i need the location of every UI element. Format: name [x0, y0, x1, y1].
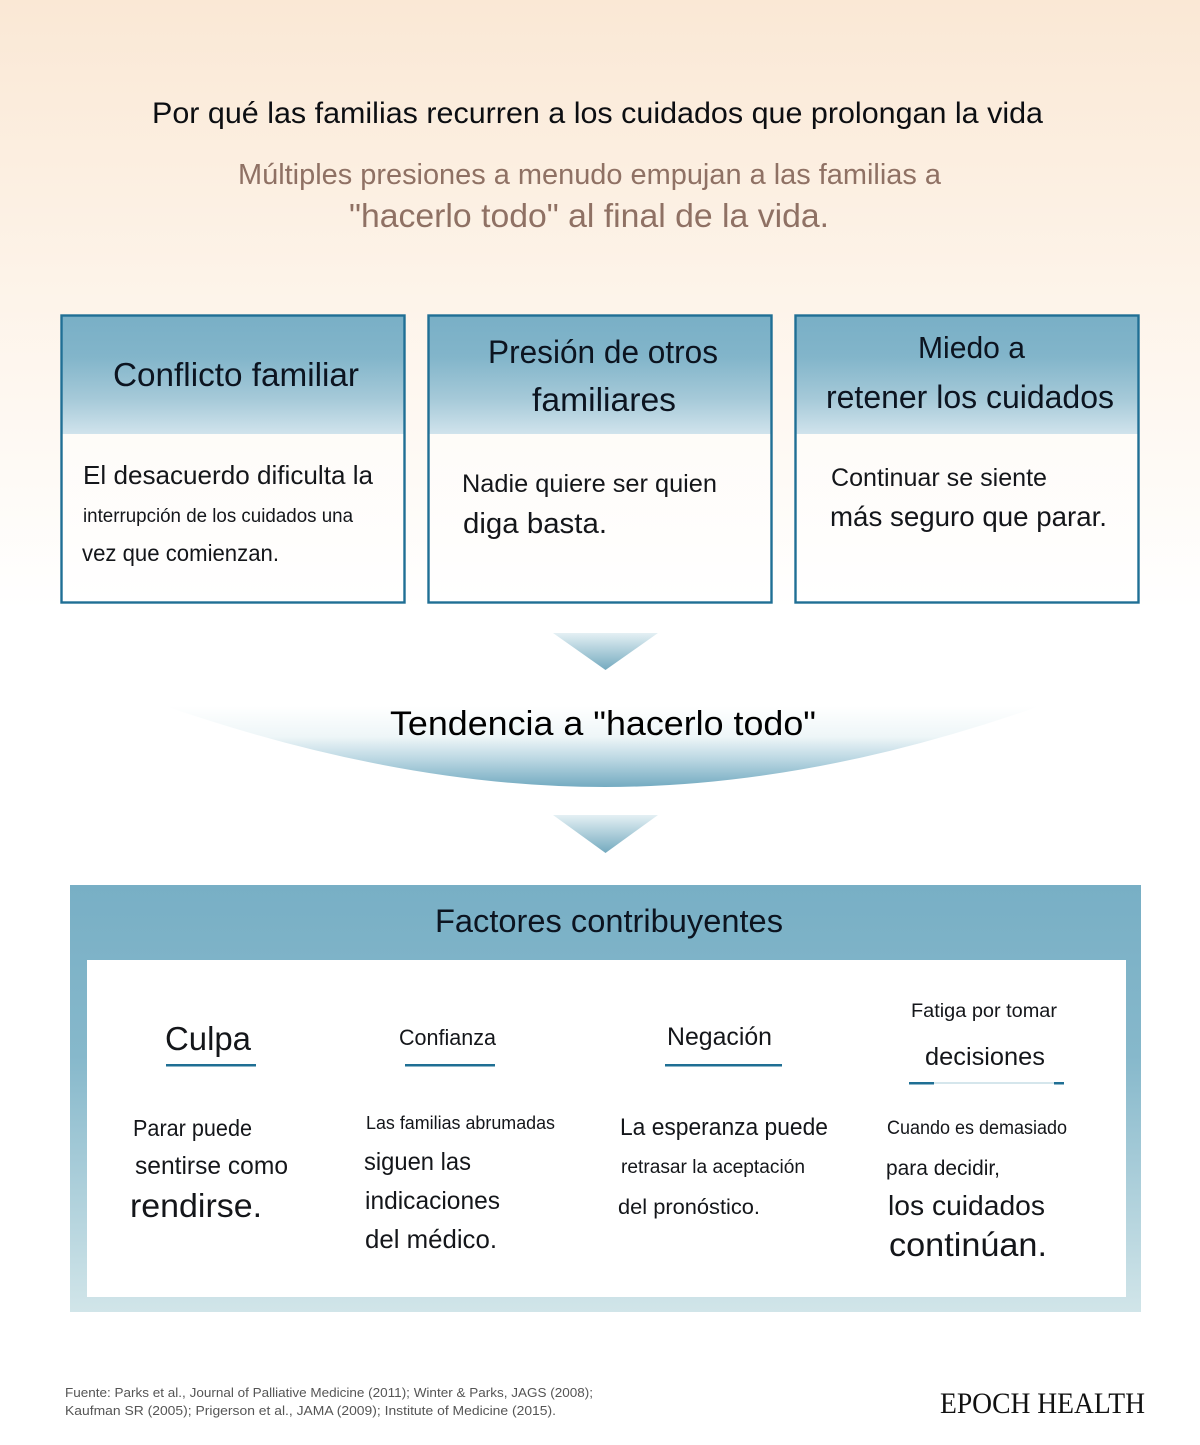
title: Por qué las familias recurren a los cuidados que prolongan la vida	[152, 97, 1043, 130]
subtitle: "hacerlo todo" al final de la vida.	[349, 197, 829, 234]
factor: culpa	[130, 1020, 288, 1224]
factor: confianza: siguen las	[364, 1148, 471, 1176]
factor: confianza	[364, 1025, 555, 1254]
factor: confianza: del médico.	[365, 1224, 497, 1254]
factor: fatiga por tomar decisiones: Fatiga por tomar	[911, 1001, 1058, 1022]
source note: Fuente: Parks et al., Journal of Palliative Medicine (2011); Winter & Parks, JAGS (2008);	[65, 1385, 593, 1400]
factor: fatiga por tomar decisiones: para decidir,	[886, 1157, 1000, 1180]
text: conflicto familiar: interrupción de los cuidados una	[83, 506, 353, 527]
factor: negación: La esperanza puede	[620, 1114, 828, 1141]
subtitle: Múltiples presiones a menudo empujan a las familias a	[238, 159, 942, 191]
text: presión de otros familiares	[462, 470, 717, 540]
factor: negación: Negación	[667, 1023, 772, 1051]
factor: culpa: sentirse como	[135, 1152, 288, 1180]
factor: negación	[618, 1023, 828, 1219]
heading: factores contribuyentes: Factores contribuyentes	[435, 903, 783, 939]
arrow: down to factors	[553, 815, 658, 853]
panel: conflicto familiar	[62, 316, 404, 602]
heading: presión de otros familiares: familiares	[532, 381, 676, 418]
factor: fatiga por tomar decisiones: los cuidados	[888, 1190, 1045, 1221]
text: conflicto familiar: El desacuerdo dificulta la	[83, 460, 374, 490]
panel: miedo a retener los cuidados	[796, 316, 1138, 602]
text: presión de otros familiares: diga basta.	[463, 508, 607, 540]
heading: presión de otros familiares: Presión de otros	[488, 334, 718, 370]
text: miedo a retener los cuidados	[830, 464, 1107, 532]
factor: fatiga por tomar decisiones: Cuando es demasiado	[887, 1118, 1067, 1139]
text: presión de otros familiares: Nadie quiere ser quien	[462, 470, 717, 498]
source note: Kaufman SR (2005); Prigerson et al., JAMA (2009); Institute of Medicine (2015).	[65, 1403, 556, 1418]
factor: negación: retrasar la aceptación	[621, 1157, 805, 1178]
subtitle	[238, 159, 942, 234]
text: conflicto familiar: vez que comienzan.	[82, 540, 279, 566]
panel: presión de otros familiares	[428, 316, 772, 602]
source note	[65, 1385, 593, 1418]
heading: miedo a retener los cuidados: retener los cuidados	[826, 379, 1114, 415]
arc: tendency band	[165, 706, 1040, 787]
heading: tendencia: Tendencia a "hacerlo todo"	[390, 705, 816, 743]
factor: culpa: rendirse.	[130, 1187, 262, 1224]
factor: fatiga por tomar decisiones	[886, 1001, 1067, 1263]
heading: conflicto familiar: Conflicto familiar	[113, 356, 359, 393]
heading: miedo a retener los cuidados	[826, 330, 1114, 415]
heading: miedo a retener los cuidados: Miedo a	[918, 330, 1026, 365]
text: conflicto familiar	[82, 460, 374, 566]
factor: fatiga por tomar decisiones: decisiones	[925, 1043, 1045, 1071]
text: miedo a retener los cuidados: más seguro que parar.	[830, 501, 1107, 532]
factor: culpa: Culpa	[165, 1020, 252, 1057]
factor: culpa: Parar puede	[133, 1115, 252, 1141]
heading: presión de otros familiares	[488, 334, 718, 418]
arrow: down to tendency	[553, 633, 658, 670]
factor: confianza: indicaciones	[365, 1187, 500, 1215]
logo: Epoch Health: EPOCH HEALTH	[940, 1387, 1145, 1420]
factor: negación: del pronóstico.	[618, 1196, 760, 1219]
factor: fatiga por tomar decisiones: continúan.	[889, 1226, 1047, 1263]
panel: factores contribuyentes	[70, 885, 1141, 1312]
factor: confianza: Las familias abrumadas	[366, 1113, 555, 1133]
factor: confianza: Confianza	[399, 1025, 497, 1050]
text: miedo a retener los cuidados: Continuar se siente	[831, 464, 1047, 492]
